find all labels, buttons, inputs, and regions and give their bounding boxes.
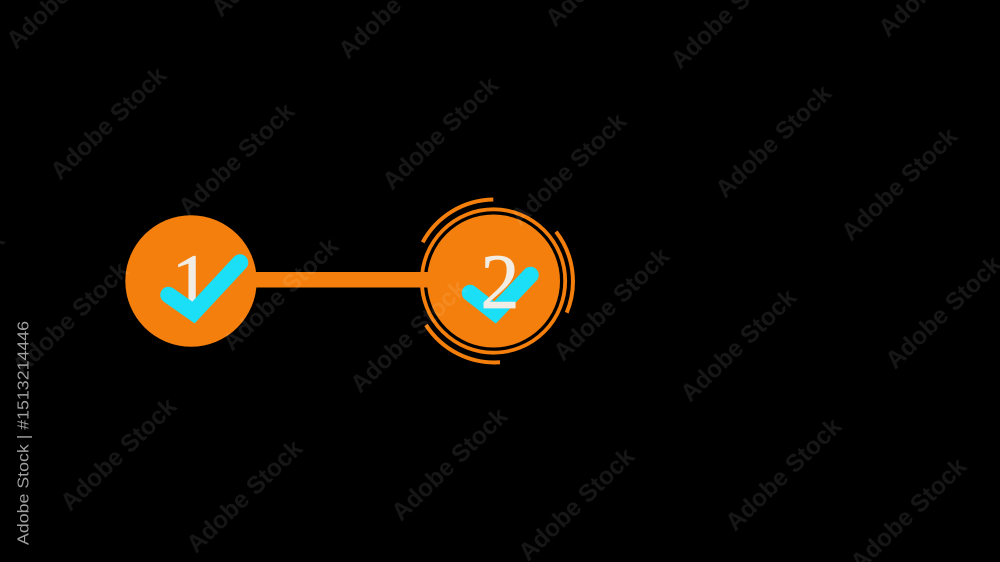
watermark pattern: Adobe Stock — [506, 108, 632, 231]
watermark pattern: Adobe Stock — [56, 393, 182, 516]
watermark pattern: Adobe Stock — [346, 275, 472, 398]
watermark pattern: Adobe Stock — [721, 413, 847, 536]
watermark pattern: Adobe Stock — [676, 284, 802, 407]
vertical stock id text: Adobe Stock | #1513214446 — [16, 321, 32, 545]
watermark pattern: Adobe Stock — [218, 233, 344, 356]
watermark pattern: Adobe Stock — [549, 243, 675, 366]
step 2 badge with rings: 2 — [480, 238, 520, 325]
step 1 badge: 1 — [172, 238, 210, 325]
watermark pattern: Adobe Stock — [174, 98, 300, 221]
connector bar between steps — [250, 272, 430, 288]
watermark pattern: Adobe Stock — [46, 62, 172, 185]
watermark pattern: Adobe Stock — [711, 80, 837, 203]
step 1 badge — [125, 215, 257, 347]
watermark pattern: Adobe Stock — [182, 435, 308, 558]
watermark pattern: Adobe Stock — [837, 123, 963, 246]
watermark pattern: Adobe Stock — [378, 72, 504, 195]
step 2 badge with rings — [422, 200, 573, 362]
watermark pattern: Adobe Stock — [387, 403, 513, 526]
watermark pattern: Adobe Stock — [8, 257, 134, 380]
